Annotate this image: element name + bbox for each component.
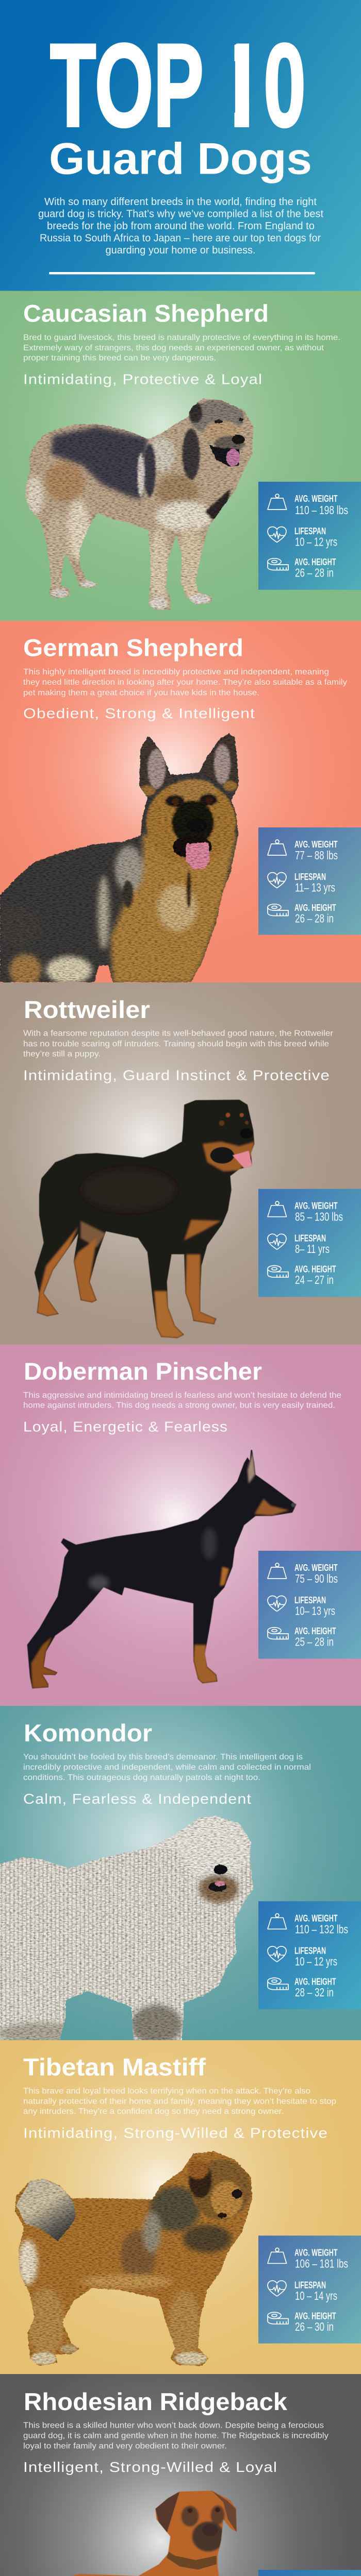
icon: weight bbox=[268, 840, 287, 855]
stat: weight: AVG. WEIGHT bbox=[294, 1913, 337, 1923]
icon: heart bbox=[268, 873, 286, 888]
stat: lifespan bbox=[294, 2280, 337, 2302]
description: This highly intelligent breed is incredibly protective and independent, meaning bbox=[23, 668, 329, 676]
stat: weight: AVG. WEIGHT bbox=[294, 839, 337, 850]
stat: lifespan: LIFESPAN bbox=[294, 2280, 326, 2290]
description bbox=[23, 2421, 329, 2450]
stat: weight bbox=[294, 2247, 348, 2270]
description bbox=[23, 668, 347, 697]
panel: Tibetan Mastiff bbox=[0, 2040, 361, 2374]
icon: heart bbox=[268, 527, 286, 542]
description: Extremely wary of strangers, this dog needs an experienced owner, as without bbox=[23, 344, 324, 352]
description: You shouldn’t be fooled by this breed’s demeanor. This intelligent dog is bbox=[23, 1753, 303, 1761]
dog photo: Rottweiler bbox=[35, 1099, 254, 1338]
title: Guard Dogs: Guard Dogs bbox=[49, 134, 312, 183]
stat: weight: AVG. WEIGHT bbox=[294, 1201, 337, 1211]
stats panel bbox=[258, 2570, 361, 2576]
description: pet making them a great choice if you have kids in the house. bbox=[23, 688, 259, 697]
title: Top 10: 1 bbox=[209, 20, 274, 151]
traits: Intimidating, Guard Instinct & Protective bbox=[23, 1067, 330, 1083]
stat: weight: 77 – 88 lbs bbox=[295, 849, 338, 862]
stat: weight bbox=[294, 839, 338, 862]
icon: tape measure bbox=[268, 1628, 288, 1639]
description: Bred to guard livestock, this breed is naturally protective of everything in its home. bbox=[23, 333, 340, 342]
traits: Calm, Fearless & Independent bbox=[23, 1791, 252, 1807]
stat: height: 26 – 30 in bbox=[295, 2320, 334, 2333]
dog photo: Doberman Pinscher bbox=[27, 1450, 297, 1688]
stats panel bbox=[258, 827, 361, 935]
icon: heart bbox=[268, 1946, 286, 1962]
stat: height bbox=[294, 1976, 336, 1999]
stats panel bbox=[258, 1901, 361, 2009]
stat: height: AVG. HEIGHT bbox=[294, 1626, 336, 1636]
stat: weight bbox=[294, 1201, 343, 1224]
title: Top 10: TOP bbox=[50, 20, 204, 151]
panel: Caucasian Shepherd bbox=[0, 291, 361, 621]
traits: Loyal, Energetic & Fearless bbox=[23, 1419, 228, 1435]
stat: weight: 75 – 90 lbs bbox=[295, 1572, 338, 1585]
icon: heart bbox=[268, 2281, 286, 2296]
stat: height bbox=[294, 903, 336, 925]
dog photo: Komondor bbox=[0, 1816, 253, 2045]
stat: height bbox=[294, 557, 336, 579]
dog photo: German Shepherd bbox=[0, 734, 238, 986]
heading: Doberman Pinscher bbox=[24, 1358, 262, 1385]
stat: lifespan: LIFESPAN bbox=[294, 1595, 326, 1605]
description: With a fearsome reputation despite its well-behaved good nature, the Rottweiler bbox=[23, 1029, 334, 1038]
description: This brave and loyal breed looks terrifying when on the attack. They’re also bbox=[23, 2087, 310, 2096]
icon: tape measure bbox=[268, 1978, 288, 1990]
stat: weight: AVG. WEIGHT bbox=[294, 1563, 337, 1573]
description bbox=[23, 333, 340, 363]
dog photo: Caucasian Shepherd bbox=[25, 398, 253, 611]
icon: tape measure bbox=[268, 904, 288, 916]
stat: lifespan: 10– 13 yrs bbox=[295, 1604, 335, 1618]
stat: height bbox=[294, 1626, 336, 1649]
icon: weight bbox=[268, 2248, 287, 2263]
description: incredibly protective and independent, while calm and collected in normal bbox=[23, 1763, 311, 1772]
stat: lifespan: LIFESPAN bbox=[294, 526, 326, 536]
icon: weight bbox=[268, 1563, 287, 1579]
description: has no trouble scaring off intruders. Training should begin with this breed while bbox=[23, 1040, 329, 1048]
stat: height: AVG. HEIGHT bbox=[294, 903, 336, 913]
panel: German Shepherd bbox=[0, 621, 361, 986]
stat: lifespan: LIFESPAN bbox=[294, 872, 326, 882]
icon: heart bbox=[268, 1234, 286, 1249]
stat: height: AVG. HEIGHT bbox=[294, 1264, 336, 1275]
stat: lifespan: 11– 13 yrs bbox=[295, 881, 335, 894]
stat: height bbox=[294, 2311, 336, 2333]
description: any intruders. They’re a confident dog so they need a strong owner. bbox=[23, 2107, 284, 2116]
stat: height: 28 – 32 in bbox=[295, 1986, 334, 1999]
stats panel bbox=[258, 482, 361, 590]
traits: Intimidating, Strong-Willed & Protective bbox=[23, 2125, 328, 2141]
stat: height: 25 – 28 in bbox=[295, 1635, 334, 1649]
stat: lifespan bbox=[294, 1595, 335, 1618]
heading: Caucasian Shepherd bbox=[23, 300, 269, 327]
stat: height bbox=[294, 1264, 336, 1286]
description: conditions. This outrageous dog naturally patrols at night too. bbox=[23, 1773, 260, 1782]
icon: weight bbox=[268, 1201, 287, 1217]
description: home against intruders. This dog needs a strong owner, but is very easily trained. bbox=[23, 1401, 335, 1410]
stat: lifespan bbox=[294, 1945, 337, 1968]
stat: weight: AVG. WEIGHT bbox=[294, 2247, 337, 2258]
panel: Rhodesian Ridgeback bbox=[0, 2374, 361, 2576]
intro paragraph bbox=[38, 196, 323, 256]
icon: tape measure bbox=[268, 1265, 288, 1277]
stat: height: AVG. HEIGHT bbox=[294, 1976, 336, 1987]
stat: lifespan bbox=[294, 1233, 330, 1256]
stat: weight: AVG. WEIGHT bbox=[294, 494, 337, 504]
icon: weight bbox=[268, 1913, 287, 1929]
description: This breed is a skilled hunter who won’t back down. Despite being a ferocious bbox=[23, 2421, 324, 2430]
stat: lifespan: LIFESPAN bbox=[294, 1233, 326, 1244]
stats panel bbox=[258, 1189, 361, 1297]
stat: lifespan bbox=[294, 526, 337, 548]
stat: weight bbox=[294, 1913, 348, 1936]
stat: lifespan bbox=[294, 872, 335, 894]
icon: heart bbox=[268, 1596, 286, 1612]
stat: weight bbox=[294, 494, 348, 517]
panel: Doberman Pinscher bbox=[0, 1345, 361, 1706]
panel: Komondor bbox=[0, 1706, 361, 2045]
title: Top 10: 0 bbox=[264, 20, 306, 151]
dog photo: Rhodesian Ridgeback bbox=[11, 2490, 237, 2576]
icon: tape measure bbox=[268, 558, 288, 570]
intro paragraph: Russia to South Africa to Japan – here are our top ten dogs for bbox=[40, 233, 321, 244]
heading: German Shepherd bbox=[23, 634, 243, 662]
description bbox=[23, 1029, 334, 1058]
heading: Komondor bbox=[24, 1719, 152, 1747]
stat: height: 24 – 27 in bbox=[295, 1273, 334, 1286]
intro paragraph: With so many different breeds in the world, finding the right bbox=[44, 196, 317, 208]
description: they need little direction in looking after your home. They’re also suitable as a family bbox=[23, 678, 347, 687]
intro paragraph: guard dog is tricky. That’s why we’ve compiled a list of the best bbox=[38, 208, 323, 219]
stat: lifespan: 8– 11 yrs bbox=[295, 1242, 330, 1256]
description: proper training this breed can be very dangerous. bbox=[23, 353, 216, 363]
stat: lifespan: 10 – 12 yrs bbox=[295, 1955, 337, 1968]
traits: Intelligent, Strong-Willed & Loyal bbox=[23, 2459, 277, 2475]
icon: weight bbox=[268, 494, 287, 510]
stat: lifespan: LIFESPAN bbox=[294, 1945, 326, 1956]
panel: Rottweiler bbox=[0, 982, 361, 1345]
panel: header bbox=[0, 0, 361, 291]
intro paragraph: breeds for the job from around the world. From England to bbox=[47, 221, 315, 232]
heading: Tibetan Mastiff bbox=[23, 2053, 206, 2080]
traits: Intimidating, Protective & Loyal bbox=[23, 371, 262, 387]
stat: lifespan: 10 – 14 yrs bbox=[295, 2289, 337, 2302]
description: This aggressive and intimidating breed is fearless and won’t hesitate to defend the bbox=[23, 1391, 341, 1400]
description bbox=[23, 1391, 341, 1410]
description: they’re still a puppy. bbox=[23, 1050, 101, 1058]
stat: height: AVG. HEIGHT bbox=[294, 2311, 336, 2321]
dog photo: Tibetan Mastiff bbox=[15, 2151, 252, 2366]
stat: lifespan: 10 – 12 yrs bbox=[295, 535, 337, 548]
description bbox=[23, 1753, 311, 1782]
stats panel bbox=[258, 1551, 361, 1659]
stat: height: 26 – 28 in bbox=[295, 912, 334, 925]
description: guard dog, it is calm and gentle when in the home. The Ridgeback is incredibly bbox=[23, 2432, 329, 2441]
stats panel bbox=[258, 2235, 361, 2344]
stat: weight: 85 – 130 lbs bbox=[295, 1210, 343, 1224]
icon: tape measure bbox=[268, 2312, 288, 2324]
heading: Rottweiler bbox=[24, 996, 150, 1023]
traits: Obedient, Strong & Intelligent bbox=[23, 705, 255, 721]
description bbox=[23, 2087, 336, 2116]
title: Top 10 bbox=[50, 42, 304, 129]
stat: weight bbox=[294, 1563, 338, 1585]
description: loyal to their family and very obedient to their owner. bbox=[23, 2442, 227, 2450]
description: naturally protective of their home and family, meaning they won’t hesitate to stop bbox=[23, 2097, 336, 2106]
heading: Rhodesian Ridgeback bbox=[24, 2388, 288, 2415]
stat: height: AVG. HEIGHT bbox=[294, 557, 336, 567]
intro paragraph: guarding your home or business. bbox=[105, 245, 256, 256]
stat: height: 26 – 28 in bbox=[295, 566, 334, 579]
